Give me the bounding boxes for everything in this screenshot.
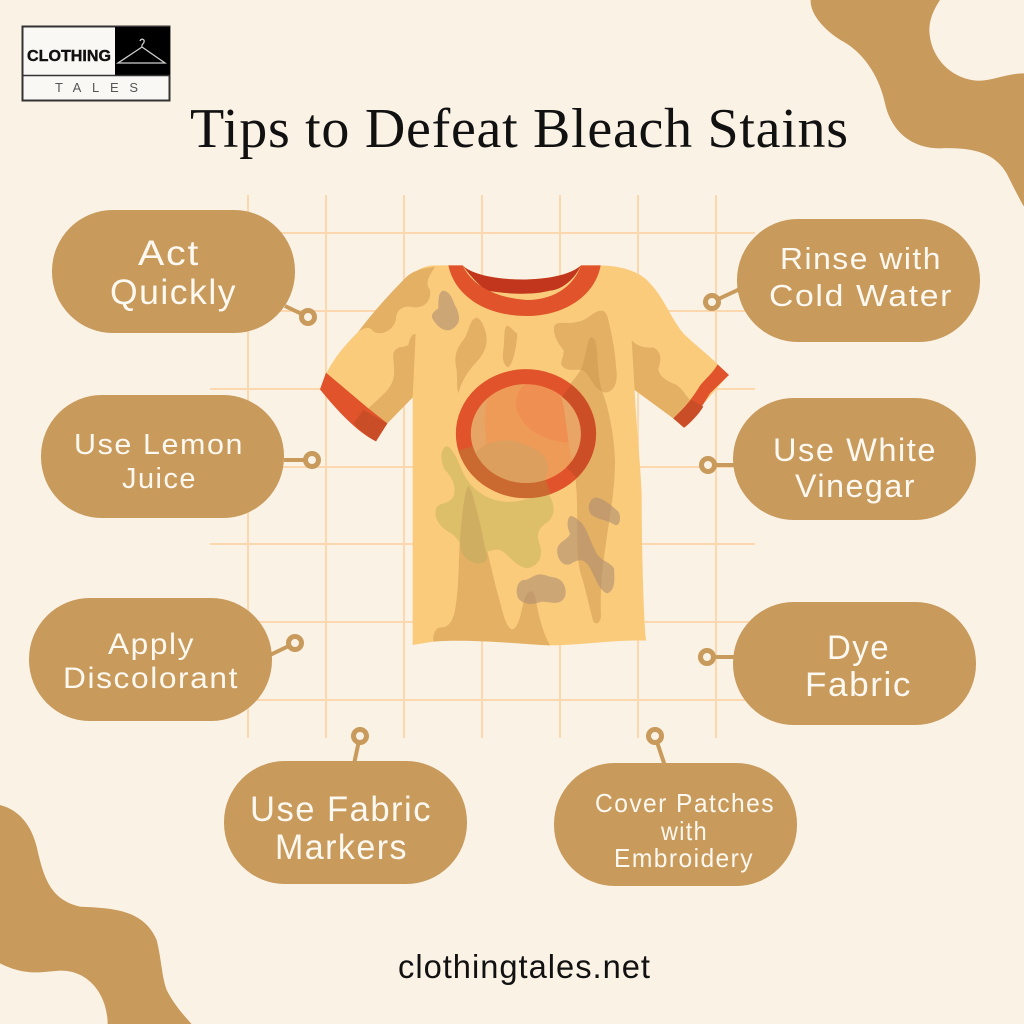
large green stain	[435, 446, 554, 568]
shirt collar	[448, 265, 601, 316]
callout: Use Lemon Juice: Juice	[122, 463, 197, 495]
callout: Dye Fabric	[700, 602, 976, 725]
callout: Use White Vinegar	[702, 398, 976, 520]
callout: Use White Vinegar: Use White	[773, 432, 937, 468]
title: Tips to Defeat Bleach Stains	[190, 98, 848, 160]
background grid	[210, 195, 755, 738]
callout: Act Quickly: Act	[138, 234, 200, 273]
callout: Act Quickly: Quickly	[110, 273, 237, 312]
right sleeve cuff	[673, 364, 729, 428]
callout: Apply Discolorant: Apply	[108, 628, 195, 661]
callout: Use Fabric Markers: Use Fabric	[250, 790, 432, 829]
callout: Use Lemon Juice	[41, 395, 318, 518]
shadow stain over green	[460, 486, 487, 563]
callout: Use Lemon Juice: Use Lemon	[74, 429, 244, 461]
chest circle ring	[463, 377, 589, 491]
callout: Rinse with Cold Water: Cold Water	[769, 278, 953, 313]
grey stains	[432, 291, 620, 604]
callout: Cover Patches with Embroidery: Cover Patches	[595, 788, 775, 818]
callout: Dye Fabric: Fabric	[805, 666, 912, 704]
decorative blob: bottom left	[0, 805, 192, 1024]
callout: Apply Discolorant: Discolorant	[63, 662, 239, 695]
callout: Use Fabric Markers: Markers	[275, 828, 408, 867]
callout: Use Fabric Markers	[224, 730, 467, 884]
footer url: clothingtales.net	[398, 948, 651, 985]
callout: Use White Vinegar: Vinegar	[795, 468, 916, 504]
callout: Cover Patches with Embroidery: with	[660, 816, 708, 846]
callout: Act Quickly	[52, 210, 314, 333]
logo	[22, 26, 170, 100]
decorative blob: top right	[811, 0, 1024, 207]
callout: Cover Patches with Embroidery: Embroidery	[614, 843, 754, 873]
callout: Cover Patches with Embroidery	[554, 730, 797, 886]
logo: CLOTHING	[27, 48, 111, 65]
callout: Dye Fabric: Dye	[827, 629, 890, 667]
right vertical stain band	[568, 337, 615, 623]
left sleeve cuff	[320, 373, 387, 441]
callout: Apply Discolorant	[29, 598, 302, 721]
logo: TALES	[55, 80, 138, 95]
shirt tan stains	[358, 267, 690, 645]
callout: Rinse with Cold Water	[706, 219, 980, 342]
callout: Rinse with Cold Water: Rinse with	[780, 241, 942, 276]
chest circle fill	[463, 379, 590, 494]
illustration: stained t-shirt	[320, 265, 729, 645]
